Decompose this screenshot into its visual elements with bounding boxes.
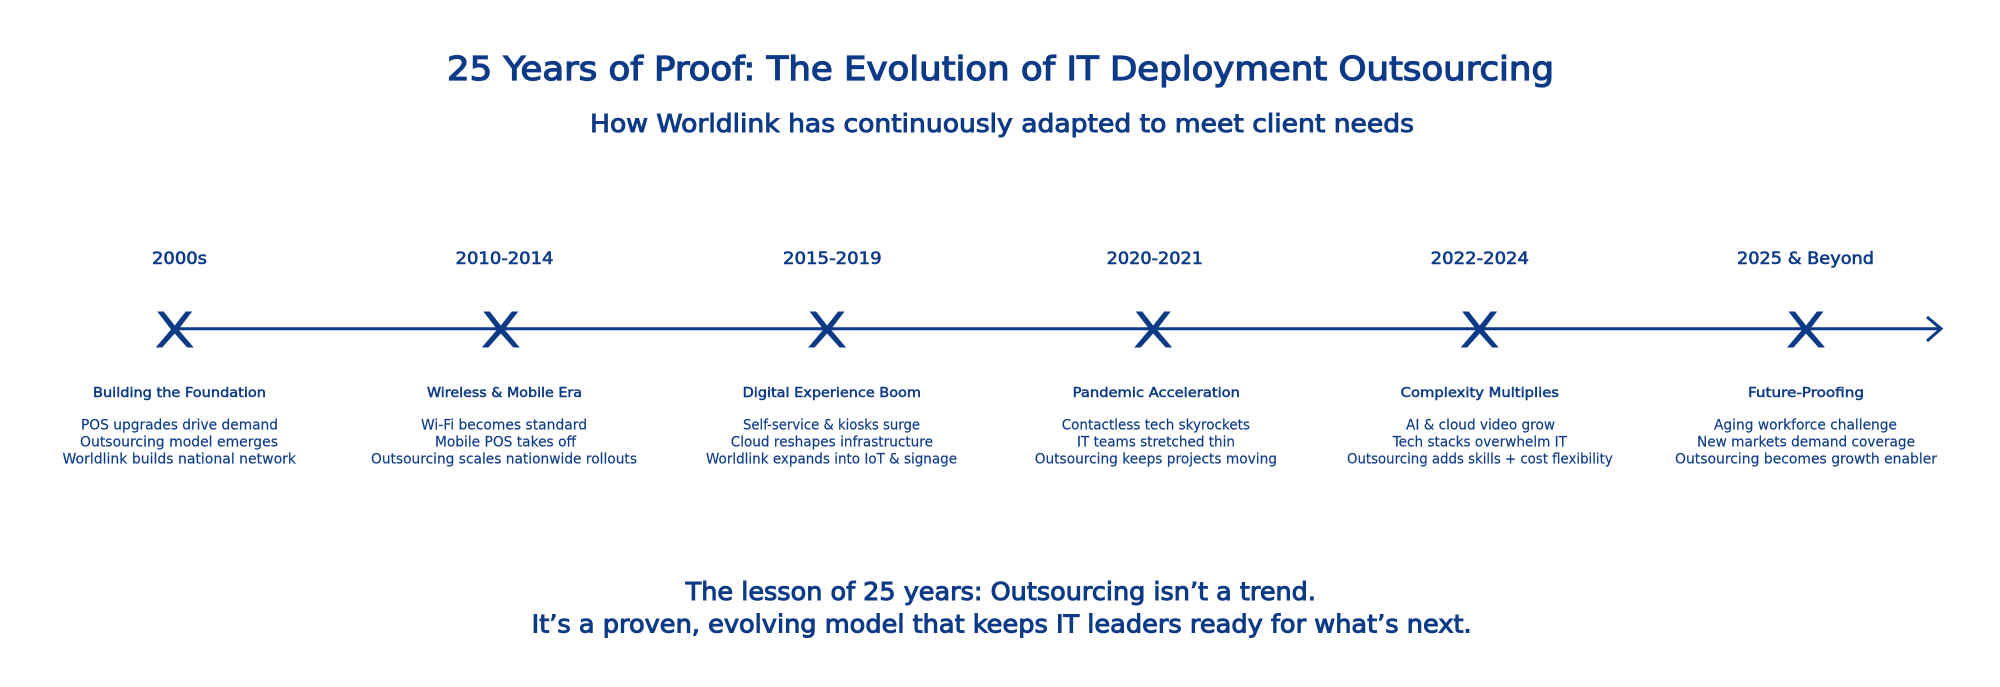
- era details: Worldlink builds national network: [62, 451, 296, 467]
- subtitle: How Worldlink has continuously adapted to meet client needs: [590, 109, 1414, 138]
- era details: Worldlink expands into IoT & signage: [706, 451, 957, 467]
- era details: Outsourcing scales nationwide rollouts: [371, 451, 637, 467]
- era details: Outsourcing becomes growth enabler: [1675, 451, 1937, 467]
- era details: Mobile POS takes off: [435, 434, 576, 450]
- era details: [1347, 417, 1613, 467]
- era details: AI & cloud video grow: [1406, 417, 1555, 433]
- era details: [1675, 417, 1937, 467]
- year label: 2025 & Beyond: [1737, 249, 1874, 268]
- closing statement: The lesson of 25 years: Outsourcing isn’t a trend.: [685, 577, 1316, 606]
- icon: x marker: [156, 312, 194, 348]
- year label: 2000s: [152, 249, 207, 268]
- panel: 2000s: [62, 249, 296, 467]
- panel: 2010-2014: [371, 249, 637, 467]
- era details: [62, 417, 296, 467]
- icon: x marker: [1134, 312, 1172, 348]
- era details: Self-service & kiosks surge: [743, 417, 920, 433]
- icon: x marker: [808, 312, 846, 348]
- era details: Aging workforce challenge: [1714, 417, 1897, 433]
- era details: Tech stacks overwhelm IT: [1392, 434, 1568, 450]
- panel: 2022-2024: [1347, 249, 1613, 467]
- era details: Outsourcing model emerges: [80, 434, 278, 450]
- year label: 2015-2019: [783, 249, 882, 268]
- year label: 2022-2024: [1431, 249, 1529, 268]
- era details: [706, 417, 957, 467]
- era details: IT teams stretched thin: [1077, 434, 1235, 450]
- era heading: Pandemic Acceleration: [1073, 385, 1240, 401]
- panel: 2025 and beyond: [1675, 249, 1937, 467]
- era details: New markets demand coverage: [1697, 434, 1915, 450]
- era heading: Complexity Multiplies: [1401, 385, 1559, 401]
- timeline arrow axis: [174, 317, 1941, 341]
- closing statement: [532, 577, 1472, 639]
- icon: x marker: [482, 312, 520, 348]
- panel: 2020-2021: [1035, 249, 1277, 467]
- title: 25 Years of Proof: The Evolution of IT Deployment Outsourcing: [447, 49, 1554, 88]
- era details: Outsourcing keeps projects moving: [1035, 451, 1277, 467]
- year label: 2010-2014: [456, 249, 554, 268]
- era details: Contactless tech skyrockets: [1062, 417, 1250, 433]
- era details: [371, 417, 637, 467]
- era details: Outsourcing adds skills + cost flexibility: [1347, 451, 1613, 467]
- closing statement: It’s a proven, evolving model that keeps IT leaders ready for what’s next.: [532, 610, 1472, 639]
- era heading: Future-Proofing: [1748, 385, 1864, 401]
- era details: POS upgrades drive demand: [81, 417, 278, 433]
- era details: Cloud reshapes infrastructure: [731, 434, 933, 450]
- panel: 2015-2019: [706, 249, 957, 467]
- era details: [1035, 417, 1277, 467]
- era heading: Building the Foundation: [93, 385, 266, 401]
- era heading: Digital Experience Boom: [743, 385, 921, 401]
- era details: Wi-Fi becomes standard: [421, 417, 587, 433]
- era heading: Wireless & Mobile Era: [427, 385, 582, 401]
- icon: x marker: [1461, 312, 1499, 348]
- icon: x marker: [1787, 312, 1825, 348]
- year label: 2020-2021: [1107, 249, 1203, 268]
